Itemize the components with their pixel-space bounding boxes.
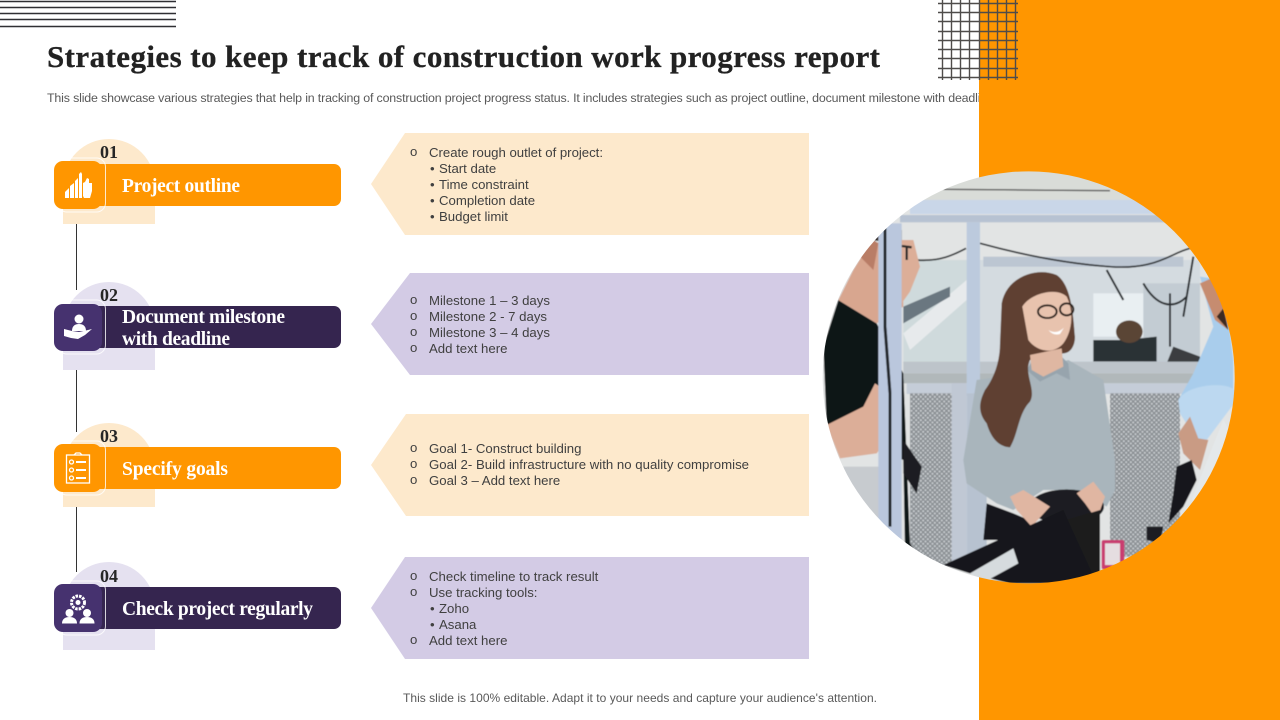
callout 4: Asana <box>439 617 477 632</box>
callout 3: o <box>410 456 417 471</box>
bar 4 <box>70 587 341 629</box>
callout 4: o <box>410 568 417 583</box>
callout 1: Completion date <box>439 193 535 208</box>
callout 4: Use tracking tools: <box>429 585 537 600</box>
icon tile 4 <box>54 584 102 632</box>
icon: rising bars with thumbs-up <box>65 172 92 198</box>
footer note: This slide is 100% editable. Adapt it to your needs and capture your audience's attention. <box>403 691 877 705</box>
callout 2: o <box>410 308 417 323</box>
icon tile 1 <box>54 161 102 209</box>
callout 4: Check timeline to track result <box>429 569 599 584</box>
callout 4: • <box>430 617 435 632</box>
photo: team in a workshop, circular crop <box>822 171 1235 584</box>
callout 1: Start date <box>439 161 496 176</box>
callout 2: Add text here <box>429 341 507 356</box>
icon tile 2 <box>54 304 102 351</box>
callout 2: Milestone 3 – 4 days <box>429 325 550 340</box>
callout 1: • <box>430 209 435 224</box>
title: Strategies to keep track of construction work progress report <box>47 39 881 74</box>
number 01: 01 <box>100 142 118 162</box>
callout 2: Milestone 1 – 3 days <box>429 293 550 308</box>
arch 4 <box>63 562 155 650</box>
callout 2: o <box>410 340 417 355</box>
label 4: Check project regularly <box>122 599 313 620</box>
step 4: check project <box>54 562 341 650</box>
icon: hand holding person <box>64 314 92 339</box>
callout 4: o <box>410 632 417 647</box>
woman <box>963 360 1115 510</box>
arch 3 <box>63 423 155 507</box>
step 1: project outline <box>54 139 341 224</box>
label 2: Document milestone <box>122 307 285 328</box>
callout 4: o <box>410 584 417 599</box>
label 1: Project outline <box>122 176 240 197</box>
orange side panel <box>979 0 1280 720</box>
callout 2: Milestone 2 - 7 days <box>429 309 547 324</box>
step 3: specify goals <box>54 423 341 507</box>
callout 1: Budget limit <box>439 209 508 224</box>
callout 1: Time constraint <box>439 177 529 192</box>
callout 4: • <box>430 601 435 616</box>
left man <box>823 300 917 553</box>
subtitle description: This slide showcase various strategies that help in tracking of construction project progress status. It includes strategies such as project outline, document milestone with deadline <box>47 91 994 105</box>
step 2: document milestone <box>54 282 341 370</box>
callout 2: o <box>410 292 417 307</box>
callout 1: o <box>410 144 417 159</box>
right man <box>1178 277 1233 400</box>
callout 1: • <box>430 161 435 176</box>
number 04: 04 <box>100 566 118 586</box>
number 02: 02 <box>100 285 118 305</box>
label 3: Specify goals <box>122 459 228 480</box>
arch 1 <box>63 139 155 224</box>
callout 3: Goal 1- Construct building <box>429 441 581 456</box>
number 03: 03 <box>100 426 118 446</box>
callout 4 <box>371 557 809 659</box>
callout 3 <box>371 414 809 516</box>
callout 4: Add text here <box>429 633 507 648</box>
callout 3: o <box>410 440 417 455</box>
callout 1: • <box>430 193 435 208</box>
icon tile 3 <box>54 444 102 492</box>
callout 3: o <box>410 472 417 487</box>
arch 2 <box>63 282 155 370</box>
icon: checklist clipboard <box>66 453 90 483</box>
callout 2: o <box>410 324 417 339</box>
callout 2 <box>371 273 809 375</box>
callout 4: Zoho <box>439 601 469 616</box>
icon: gear above two people <box>62 596 94 624</box>
bar 3 <box>70 447 341 489</box>
step 2: document milestone: with deadline <box>122 329 230 350</box>
callout 1: Create rough outlet of project: <box>429 145 603 160</box>
callout 3: Goal 2- Build infrastructure with no quality compromise <box>429 457 749 472</box>
bar 1 <box>70 164 341 206</box>
callout 1 <box>371 133 809 235</box>
bar 2 <box>70 306 341 348</box>
callout 1: • <box>430 177 435 192</box>
callout 3: Goal 3 – Add text here <box>429 473 560 488</box>
